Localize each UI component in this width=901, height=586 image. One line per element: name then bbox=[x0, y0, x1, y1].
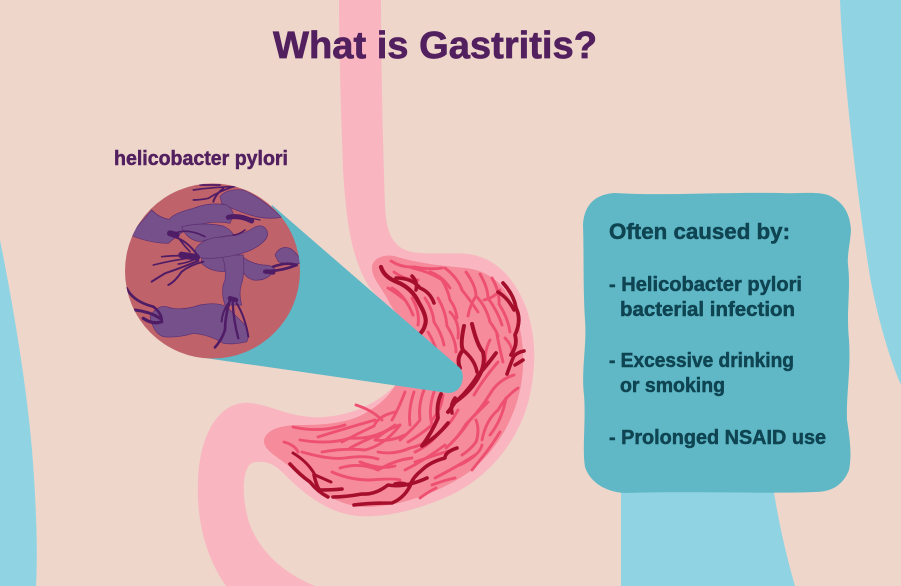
label: helicobacter pylori: helicobacter pylori bbox=[114, 148, 288, 170]
cause: NSAID: - Prolonged NSAID use bbox=[609, 427, 826, 449]
stomach and esophagus outer wall bbox=[198, 0, 534, 586]
cause: drinking or smoking: - Excessive drinking bbox=[609, 350, 794, 372]
heading: often caused by: Often caused by: bbox=[609, 219, 790, 244]
title: What is Gastritis? bbox=[273, 25, 597, 67]
stomach inner lining bbox=[264, 256, 524, 507]
cause: drinking or smoking bbox=[609, 350, 794, 397]
bacteria bodies bbox=[130, 190, 302, 344]
body silhouette: lower blue background bbox=[621, 480, 795, 586]
magnified bacteria circle bbox=[125, 184, 302, 358]
cause: drinking or smoking: or smoking bbox=[620, 375, 725, 397]
body silhouette: left blue background bbox=[0, 240, 37, 586]
cause: helicobacter: - Helicobacter pylori bbox=[609, 274, 802, 296]
flagella bbox=[127, 185, 297, 347]
magnifier cone bbox=[205, 205, 463, 393]
pink veins bbox=[284, 261, 518, 498]
dark red veins bbox=[290, 267, 524, 505]
panel: causes bbox=[583, 193, 851, 493]
body silhouette: right blue background bbox=[840, 0, 901, 385]
cause: helicobacter: bacterial infection bbox=[620, 299, 795, 321]
cause: helicobacter bbox=[609, 274, 802, 321]
